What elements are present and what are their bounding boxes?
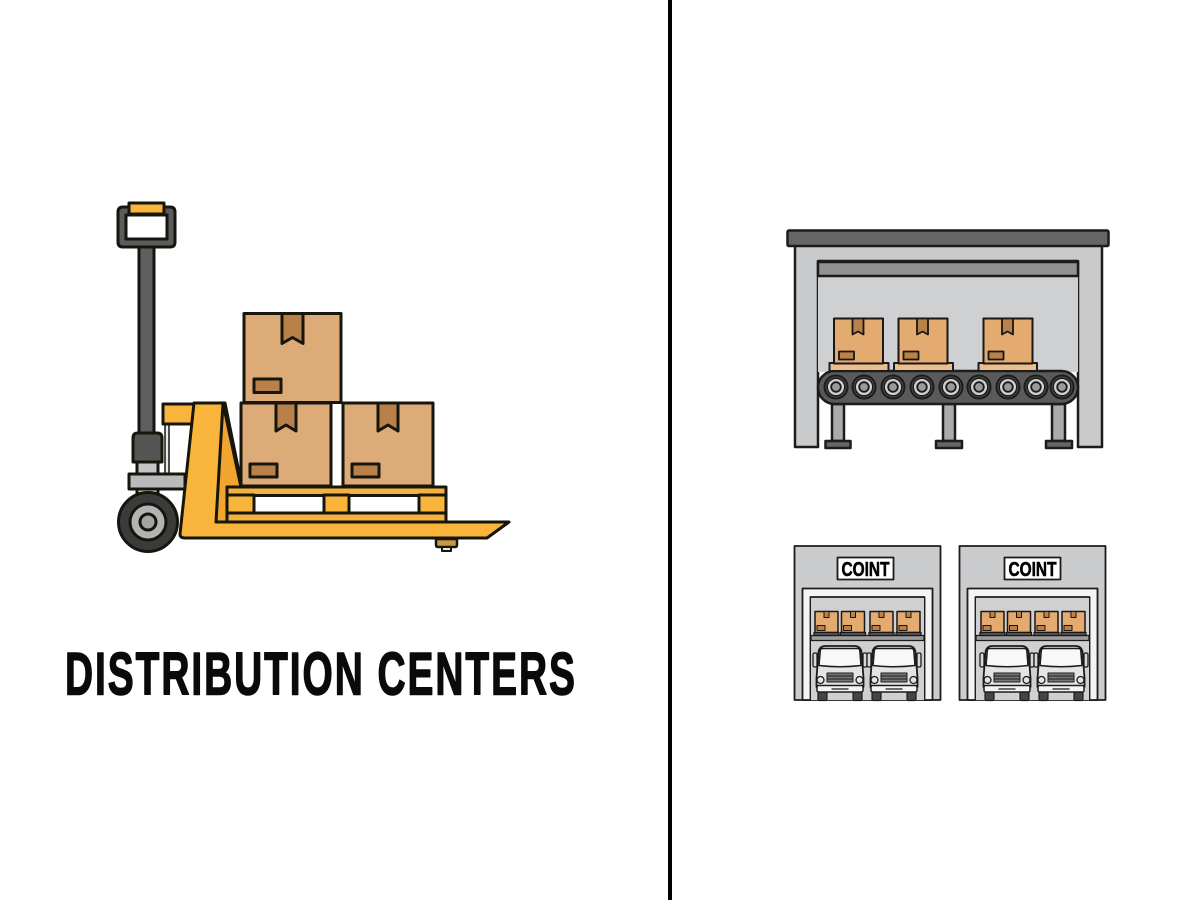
dock trucks (980, 646, 1088, 700)
central divider line (668, 0, 672, 900)
dock boxes (980, 612, 1086, 636)
dock sign: COINT (1008, 559, 1056, 581)
dock building (794, 546, 940, 700)
dock sign: COINT (842, 559, 890, 581)
dock building (960, 546, 1106, 700)
icon: bottom left box (241, 403, 331, 486)
dock boxes (814, 612, 921, 636)
icon: building frame (788, 230, 1108, 447)
icon: yellow fork frame (163, 403, 509, 538)
icon: bottom right box (343, 403, 433, 486)
dock opening (802, 588, 932, 700)
icon: jack pump assembly (129, 423, 185, 495)
icon: conveyor loading bay (788, 230, 1108, 448)
dock trucks (813, 646, 921, 700)
icon: jack handle (118, 203, 175, 433)
icon: truck dock left (794, 546, 940, 700)
icon: fork support foot (436, 539, 457, 551)
icon: top box (244, 314, 341, 402)
icon: steering wheel (118, 492, 178, 552)
icon: conveyor legs (826, 404, 1072, 448)
title: DISTRIBUTION CENTERS (65, 640, 577, 708)
icon: conveyor belt (818, 371, 1078, 404)
icon: wooden pallet (227, 487, 446, 522)
icon: conveyor boxes (830, 318, 1037, 371)
icon: truck dock right (960, 546, 1106, 700)
icon: pallet jack with boxes (118, 203, 509, 552)
dock opening (968, 588, 1098, 700)
